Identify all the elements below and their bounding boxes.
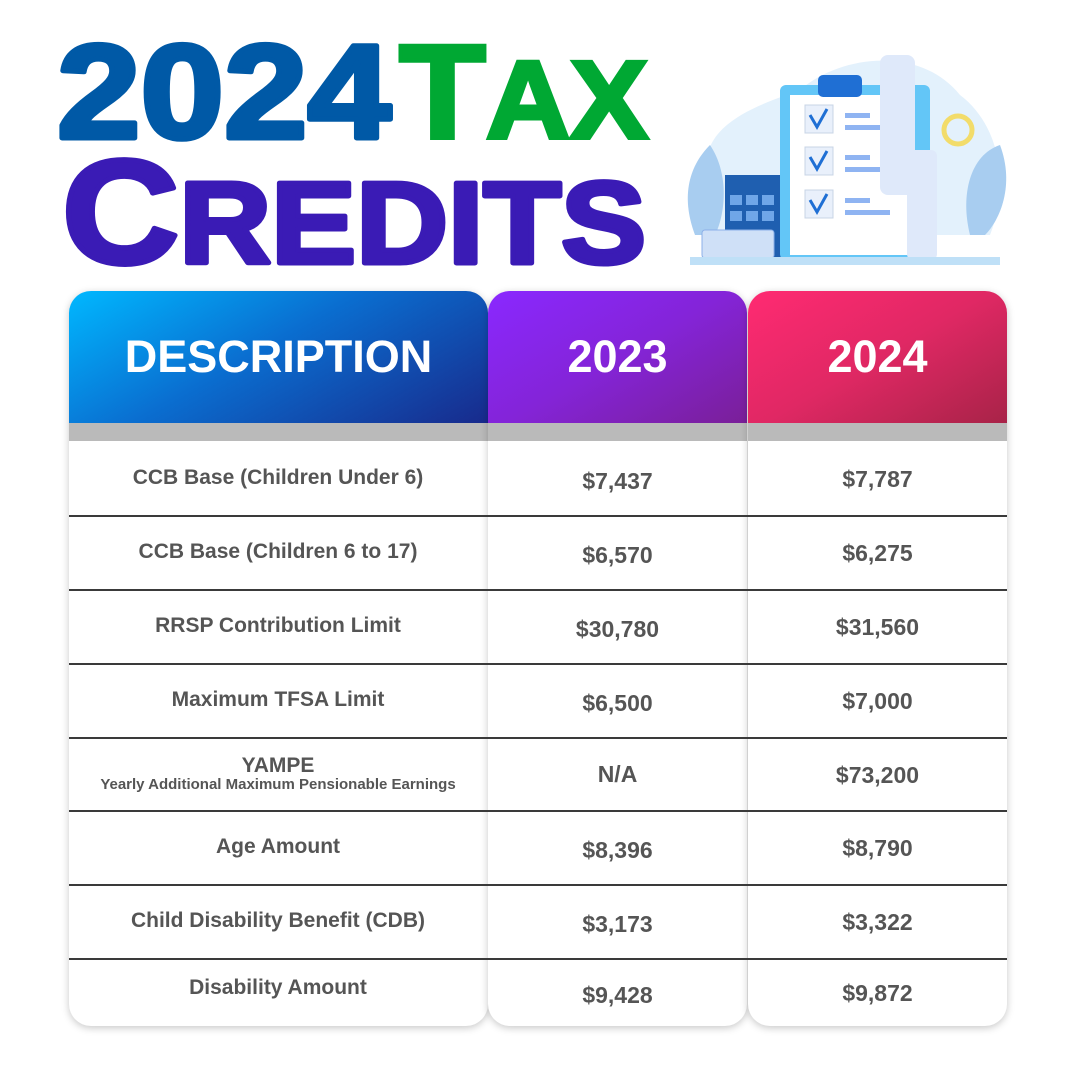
illustration: clipboard checklist <box>688 55 1006 265</box>
row: RRSP: $30,780 <box>576 616 659 642</box>
row: Disability Amount: $9,428 <box>582 982 653 1008</box>
row: Disability Amount: $9,872 <box>842 980 913 1006</box>
row: CDB: Child Disability Benefit (CDB) <box>131 909 425 932</box>
row: TFSA <box>172 688 913 716</box>
row: RRSP: RRSP Contribution Limit <box>155 614 401 637</box>
row: CCB 6 to 17: $6,570 <box>582 542 653 568</box>
row: RRSP <box>155 614 919 642</box>
header: description <box>69 291 488 423</box>
row: CCB 6 to 17 <box>139 540 913 568</box>
header: description: DESCRIPTION <box>125 331 432 382</box>
title <box>57 18 651 280</box>
row: CCB 6 to 17: $6,275 <box>842 540 913 566</box>
title: TAX <box>399 18 648 167</box>
row: RRSP: $31,560 <box>836 614 919 640</box>
panel: 2024 column <box>748 291 1007 1026</box>
row: CCB 6 to 17: CCB Base (Children 6 to 17) <box>139 540 417 563</box>
row: YAMPE <box>100 754 919 793</box>
header: 2024 <box>748 291 1007 423</box>
row: TFSA: Maximum TFSA Limit <box>172 688 384 711</box>
row: CCB under 6: $7,787 <box>842 466 913 492</box>
header: 2024: 2024 <box>827 331 928 382</box>
header: 2023 <box>488 291 747 423</box>
row: Age Amount: $8,790 <box>842 834 913 860</box>
row: YAMPE: $73,200 <box>836 762 919 788</box>
row: Age Amount <box>216 834 913 862</box>
row: CCB under 6: $7,437 <box>582 468 653 494</box>
row: TFSA: $6,500 <box>582 690 653 716</box>
row: CDB: $3,173 <box>582 910 653 936</box>
row: CCB under 6: CCB Base (Children Under 6) <box>133 466 423 489</box>
title: 2024 <box>57 18 391 167</box>
row: Age Amount: Age Amount <box>216 835 340 858</box>
row: CCB under 6 <box>133 466 913 494</box>
row: YAMPE: YAMPE <box>242 754 314 777</box>
row: TFSA: $7,000 <box>842 688 913 714</box>
header: 2023: 2023 <box>567 331 668 382</box>
row: Age Amount: $8,396 <box>582 836 653 862</box>
row: YAMPE: N/A <box>598 760 637 786</box>
row: CDB: $3,322 <box>842 908 913 934</box>
panel: description column <box>69 291 488 1026</box>
row: Disability Amount <box>189 976 913 1008</box>
row: CDB <box>131 908 913 936</box>
row: YAMPE: Yearly Additional Maximum Pensionable Earnings <box>100 776 456 793</box>
panel: 2023 column <box>488 291 747 1026</box>
row: Disability Amount: Disability Amount <box>189 976 367 999</box>
